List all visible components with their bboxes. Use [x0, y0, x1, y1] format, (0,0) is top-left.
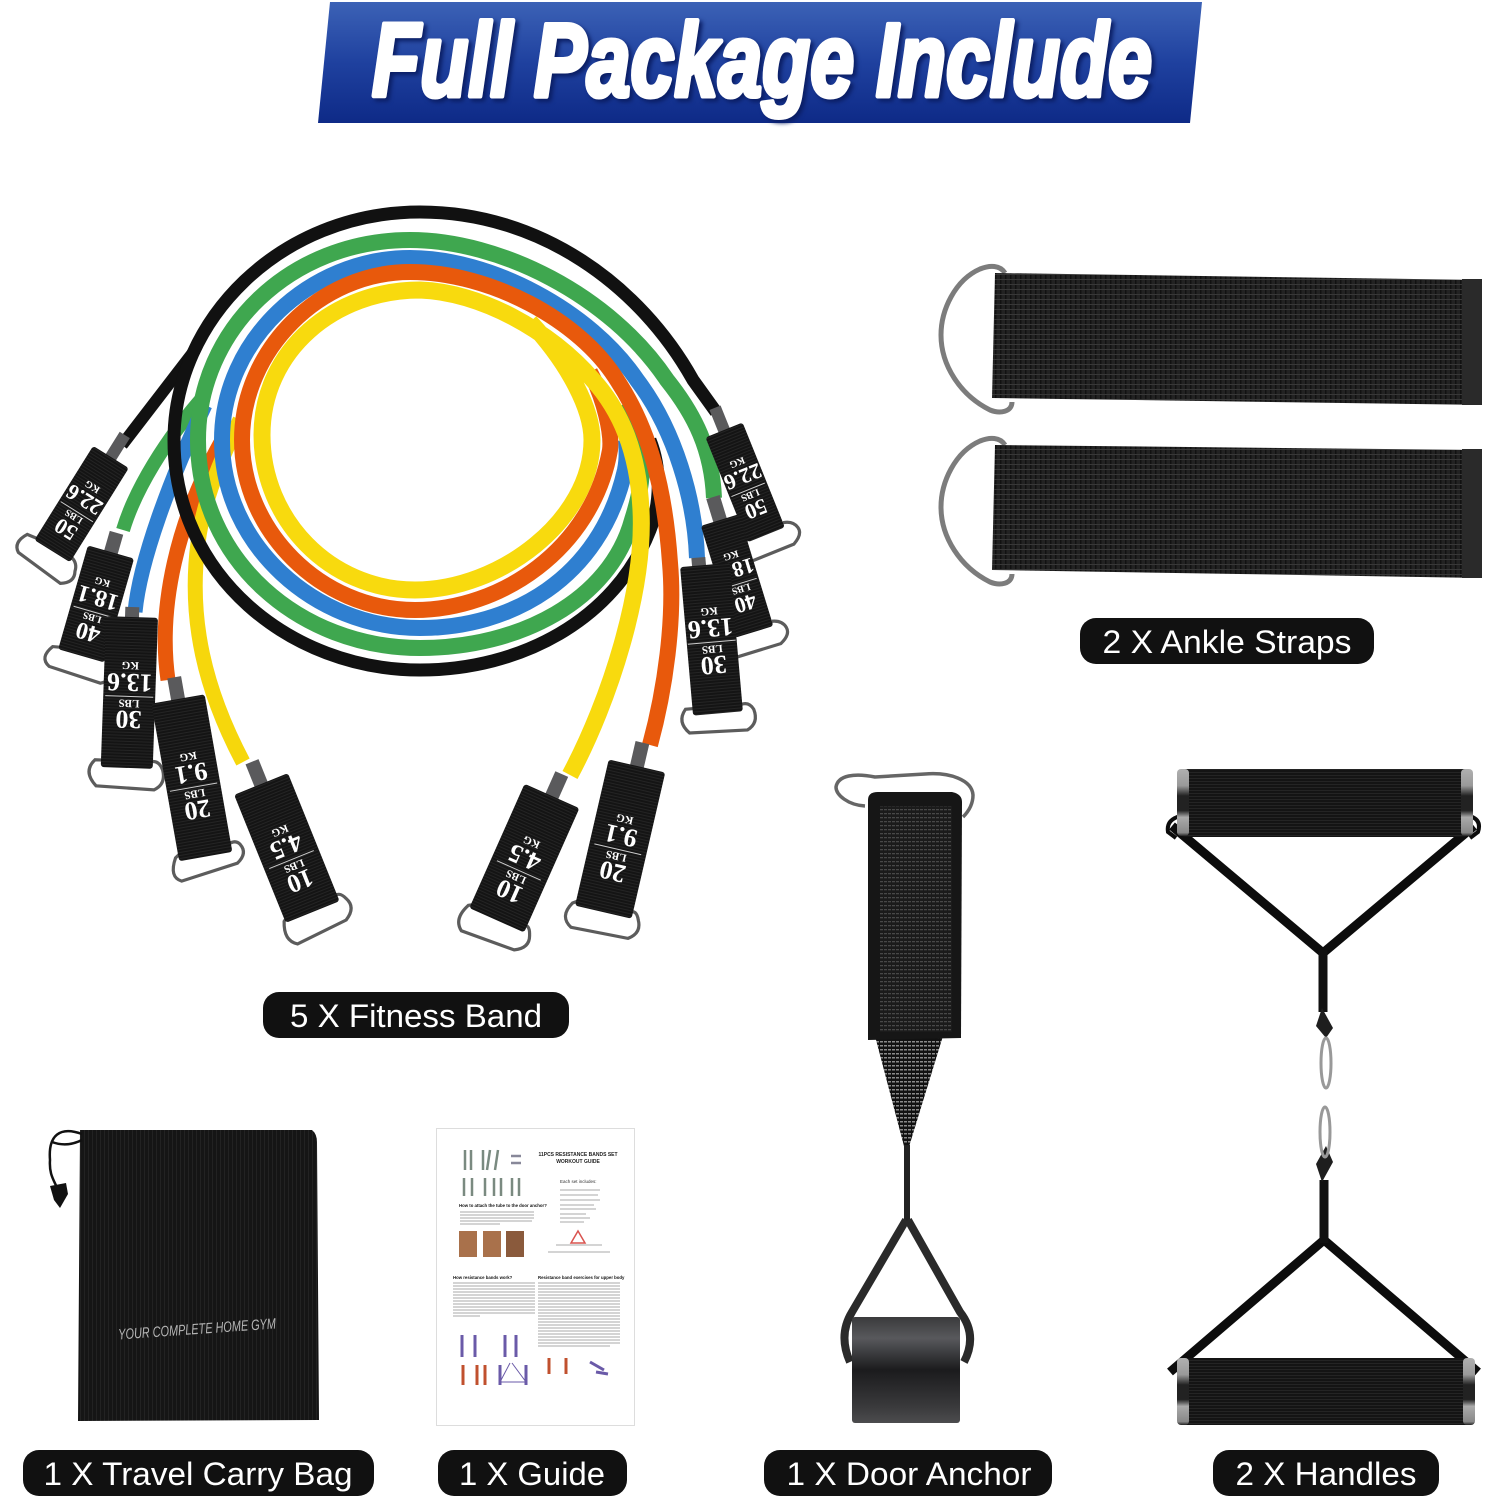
handle: orange left 20 LBS [140, 671, 247, 882]
blue band [222, 258, 697, 628]
handle: yellow left 10 LBS [221, 748, 357, 947]
handle: black right 50 LBS: LBS [739, 486, 761, 503]
label: 5 X Fitness Band [263, 992, 569, 1038]
label: 1 X Door Anchor [764, 1450, 1052, 1496]
handle: orange right 20 LBS: 9.1 [602, 818, 640, 853]
handle: green left 40 LBS: KG [93, 574, 112, 589]
handle: green left 40 LBS: LBS [81, 609, 103, 625]
handle: green right 40 LBS: LBS [730, 580, 752, 597]
label: 1 X Guide [438, 1450, 627, 1496]
carabiner [836, 774, 973, 817]
handle: black left 50 LBS: LBS [63, 506, 85, 526]
handle upper [1168, 769, 1479, 1088]
handle: orange right 20 LBS [563, 734, 679, 942]
door anchor [836, 774, 973, 1423]
black band [174, 212, 716, 670]
workout guide: How resistance bands work? [453, 1275, 513, 1280]
handle lower [1170, 1107, 1478, 1425]
handle: green right 40 LBS: KG [721, 547, 740, 563]
workout guide: Resistance band exercises for upper body [538, 1275, 625, 1280]
handle: green right 40 LBS [682, 488, 791, 659]
handle: green left 40 LBS: 18.1 [74, 579, 122, 615]
strap 1 [941, 266, 1482, 412]
handle: black left 50 LBS: 50 [50, 513, 82, 546]
handle: yellow left 10 LBS: KG [269, 822, 290, 839]
label: 1 X Travel Carry Bag [23, 1450, 374, 1496]
label: 2 X Ankle Straps: 2 X Ankle Straps [1102, 624, 1352, 660]
handle: blue left 30 LBS: 13.6 [106, 667, 153, 698]
yellow band [262, 290, 641, 775]
door photos [459, 1231, 477, 1257]
workout guide: WORKOUT GUIDE [556, 1159, 600, 1165]
guide heading: 11PCS RESISTANCE BANDS SET [538, 1152, 618, 1158]
handle: yellow right 10 LBS: KG [521, 833, 542, 851]
handle: black left 50 LBS [12, 417, 152, 588]
handle: blue left 30 LBS: LBS [118, 697, 140, 709]
handle: green right 40 LBS: 18.1 [713, 553, 757, 588]
label: 1 X Travel Carry Bag: 1 X Travel Carry Bag [44, 1456, 352, 1492]
lower strap [875, 1036, 943, 1150]
label: 1 X Guide: 1 X Guide [459, 1456, 605, 1492]
upper strap [868, 792, 962, 1040]
workout guide [436, 1128, 634, 1426]
handle: yellow right 10 LBS: 10 [492, 873, 527, 910]
foam cylinder [852, 1317, 960, 1423]
handle: green right 40 LBS: 40 [731, 589, 760, 619]
title: Full Package Include [372, 3, 1152, 119]
handle: black right 50 LBS: 50 [741, 494, 771, 525]
band tails, left [122, 350, 243, 762]
ankle straps [941, 266, 1482, 584]
handle: blue right 30 LBS: 13.6 [687, 612, 734, 645]
handle: orange right 20 LBS: LBS [605, 847, 628, 864]
workout guide: Each set includes: [560, 1179, 597, 1184]
exercise figures top [464, 1150, 519, 1196]
handle: black left 50 LBS: KG [83, 477, 102, 495]
handle: blue left 30 LBS: KG [121, 659, 139, 671]
guide paragraph lines [453, 1190, 620, 1346]
handle: orange left 20 LBS: LBS [183, 786, 206, 801]
handle: yellow right 10 LBS: 4.5 [504, 838, 545, 878]
green band [198, 240, 714, 648]
drawstring [50, 1131, 82, 1190]
strap 2 [941, 438, 1482, 584]
handle: blue right 30 LBS: 30 [700, 650, 728, 681]
handle: yellow left 10 LBS: 4.5 [266, 827, 307, 866]
exercise figures bottom [462, 1335, 526, 1385]
handle: black left 50 LBS: 22.6 [61, 479, 107, 521]
warning triangle [571, 1231, 585, 1243]
handle: orange left 20 LBS: 20 [182, 793, 213, 826]
handle: blue right 30 LBS [668, 554, 757, 736]
fitness bands [12, 212, 803, 958]
handle: orange left 20 LBS: KG [178, 749, 198, 764]
handle: orange left 20 LBS: 9.1 [173, 756, 210, 790]
handle: orange right 20 LBS: 20 [597, 855, 629, 889]
handle: black right 50 LBS: 22.6 [720, 458, 765, 496]
handle: orange right 20 LBS: KG [615, 811, 635, 826]
label: 5 X Fitness Band: 5 X Fitness Band [290, 998, 542, 1034]
label: 2 X Handles [1213, 1450, 1439, 1496]
handle: black right 50 LBS [685, 396, 803, 564]
handle: blue right 30 LBS: KG [700, 604, 718, 618]
handle: green left 40 LBS [42, 523, 149, 685]
handle: black right 50 LBS: KG [727, 454, 746, 470]
label: 1 X Door Anchor: 1 X Door Anchor [786, 1456, 1032, 1492]
orange band [242, 272, 671, 745]
handle: yellow left 10 LBS: LBS [282, 856, 306, 875]
label: 2 X Ankle Straps [1080, 618, 1374, 664]
carry bag [50, 1130, 319, 1421]
handle: yellow right 10 LBS [455, 760, 596, 958]
toggle [50, 1183, 68, 1208]
handle: green left 40 LBS: 40 [73, 616, 103, 648]
handle: blue right 30 LBS: LBS [701, 642, 723, 656]
title banner [318, 2, 1202, 123]
handle: blue left 30 LBS: 30 [115, 704, 142, 734]
bag text: YOUR COMPLETE HOME GYM [118, 1315, 277, 1343]
workout guide: How to attach the tube to the door anchor? [459, 1203, 547, 1208]
handle: yellow left 10 LBS: 10 [283, 863, 318, 899]
handle: blue left 30 LBS [88, 606, 169, 790]
handle: yellow right 10 LBS: LBS [504, 867, 528, 886]
label: 2 X Handles: 2 X Handles [1236, 1456, 1416, 1492]
